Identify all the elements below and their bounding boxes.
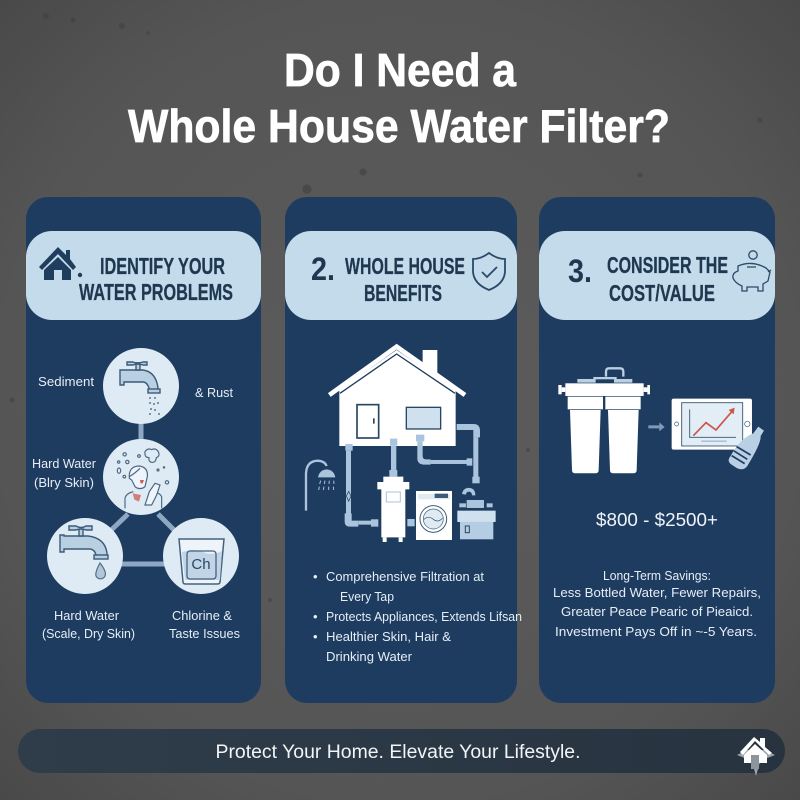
icon: faucet with sediment bbox=[103, 348, 179, 424]
icon: glass with Ch: Ch bbox=[191, 556, 211, 573]
title: Whole House Water Filter? bbox=[128, 100, 670, 152]
labels: problems: Chlorine & bbox=[172, 608, 232, 623]
labels: problems bbox=[32, 374, 240, 641]
heading pill: identify: IDENTIFY YOUR bbox=[100, 253, 225, 279]
icon: shield bbox=[473, 253, 505, 290]
illustration: twin water filter bbox=[558, 368, 764, 473]
labels: problems: Sediment bbox=[38, 374, 94, 389]
labels: problems: (Scale, Dry Skin) bbox=[42, 626, 135, 641]
labels: problems: (Blry Skin) bbox=[34, 475, 94, 490]
connector lines bbox=[105, 420, 180, 564]
icon: house bbox=[39, 247, 82, 280]
heading pill: cost: 3. bbox=[568, 253, 592, 289]
icon: piggy bank bbox=[733, 251, 771, 291]
benefits list: Protects Appliances, Extends Lifsan bbox=[326, 609, 522, 624]
savings text: Greater Peace Pearic of Pieaicd. bbox=[561, 604, 753, 619]
benefits list bbox=[313, 569, 522, 664]
icon: person with irritated skin bbox=[103, 439, 179, 515]
savings text: Investment Pays Off in ~-5 Years. bbox=[555, 624, 757, 639]
heading pill: cost bbox=[539, 231, 775, 320]
heading pill: benefits: WHOLE HOUSE bbox=[345, 253, 465, 279]
benefits list: Drinking Water bbox=[326, 649, 413, 664]
labels: problems: Hard Water bbox=[32, 456, 97, 471]
heading pill: benefits: 2. bbox=[311, 251, 335, 287]
benefits list: Healthier Skin, Hair & bbox=[326, 629, 451, 644]
heading pill: cost: COST/VALUE bbox=[609, 280, 715, 306]
benefits list: • bbox=[313, 609, 318, 624]
benefits list: • bbox=[313, 629, 318, 644]
labels: problems: Hard Water bbox=[54, 608, 120, 623]
labels: problems: Taste Issues bbox=[169, 626, 240, 641]
footer bar bbox=[18, 729, 785, 776]
price: $800 - $2500+ bbox=[596, 510, 718, 530]
panel: whole house benefits bbox=[285, 197, 522, 703]
footer bar: Protect Your Home. Elevate Your Lifestyle. bbox=[216, 742, 580, 763]
title: Do I Need a bbox=[284, 44, 516, 96]
icon: footer house bbox=[737, 737, 775, 776]
illustration: house plumbing bbox=[306, 347, 496, 542]
panel: cost and value bbox=[539, 197, 775, 703]
savings text: Less Bottled Water, Fewer Repairs, bbox=[553, 585, 761, 600]
heading pill: identify bbox=[26, 231, 261, 320]
panel: identify water problems bbox=[26, 197, 261, 703]
heading pill: benefits bbox=[285, 231, 517, 320]
heading pill: cost: CONSIDER THE bbox=[607, 252, 728, 278]
icon: faucet with drop bbox=[47, 518, 123, 594]
icon: glass with Ch bbox=[163, 518, 239, 594]
savings text: Long-Term Savings: bbox=[603, 568, 711, 583]
savings text bbox=[553, 568, 761, 639]
benefits list: Every Tap bbox=[340, 589, 394, 604]
heading pill: benefits: BENEFITS bbox=[364, 280, 442, 306]
labels: problems: & Rust bbox=[195, 385, 233, 400]
benefits list: • bbox=[313, 569, 318, 584]
heading pill: identify: WATER PROBLEMS bbox=[79, 279, 233, 305]
benefits list: Comprehensive Filtration at bbox=[326, 569, 484, 584]
title bbox=[128, 44, 670, 152]
